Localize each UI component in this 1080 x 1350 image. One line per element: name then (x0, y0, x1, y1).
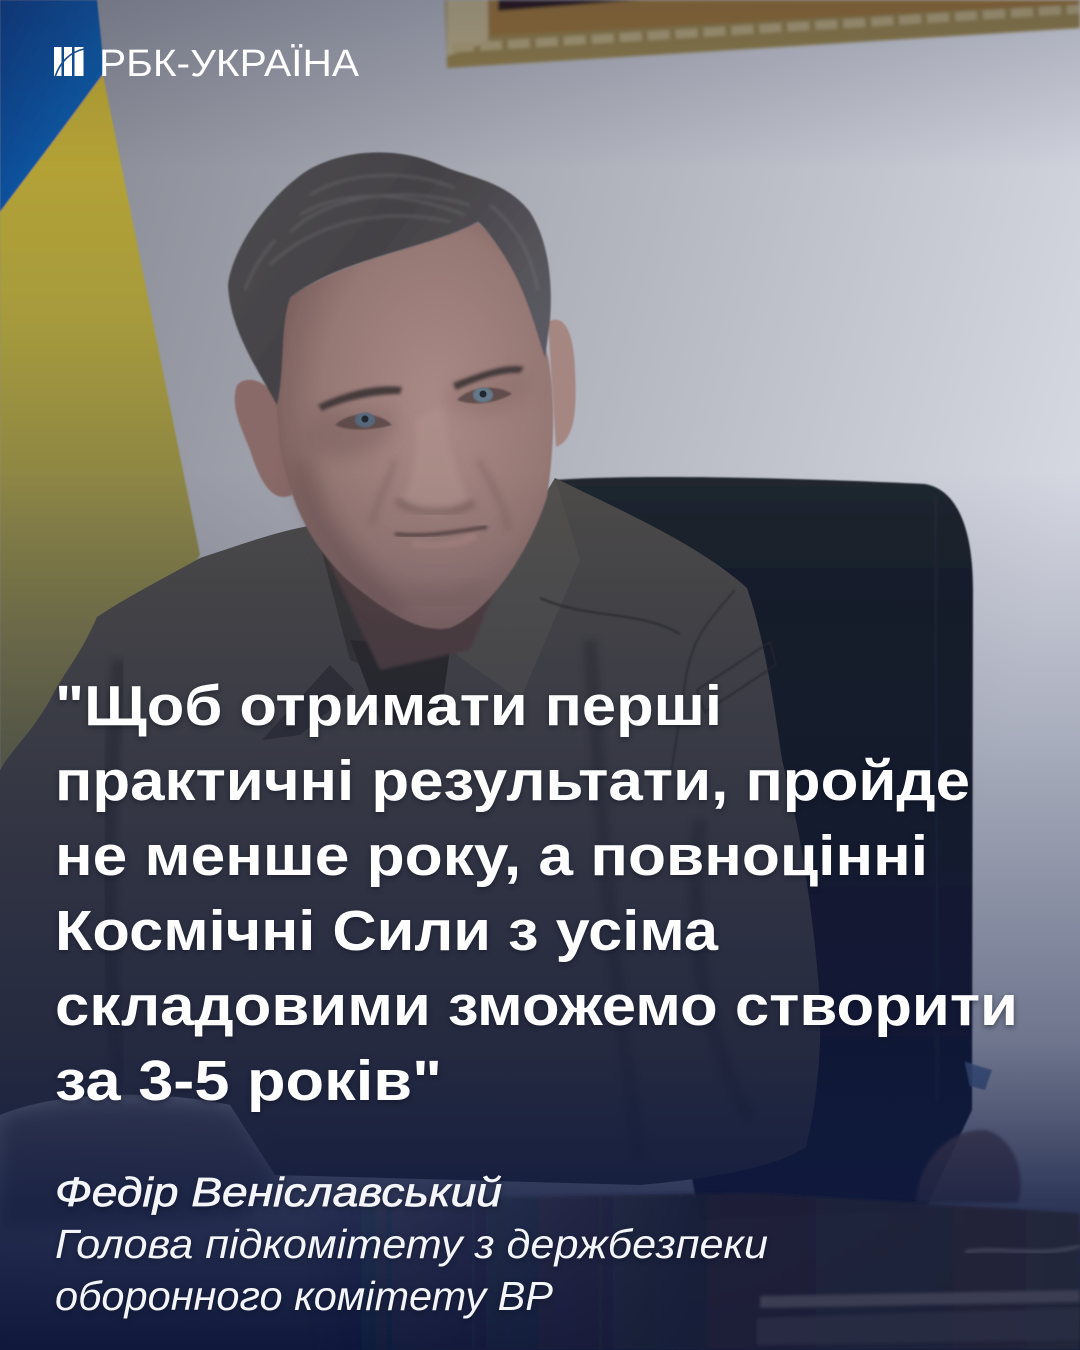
quote text: Космічні Сили з усіма (55, 899, 719, 963)
bottom gradient overlay (0, 470, 1080, 1350)
person: face (276, 222, 553, 629)
quote text: не менше року, а повноцінні (55, 824, 928, 888)
quote text (55, 674, 1018, 1113)
quote text: за 3-5 років" (55, 1049, 442, 1113)
person: torso and shirt (0, 478, 820, 1230)
person: right ear (548, 320, 576, 447)
quote text: "Щоб отримати перші (55, 674, 722, 738)
person: hair (228, 152, 551, 405)
logo wordmark: РБК-УКРАЇНА (99, 43, 360, 85)
person: neck (300, 500, 515, 670)
office chair (555, 477, 992, 1220)
attribution (55, 1169, 768, 1319)
logo icon (54, 47, 84, 77)
attribution: оборонного комітету ВР (55, 1273, 554, 1319)
person: facial features (300, 366, 535, 610)
quote text: складовими зможемо створити (55, 974, 1018, 1038)
attribution: Федір Веніславський (55, 1169, 502, 1215)
quote text: практичні результати, пройде (55, 749, 970, 813)
person: left ear (235, 380, 292, 497)
olive glimpse between arm and body (100, 950, 172, 1095)
picture frame (445, 0, 1080, 68)
logo: РБК-Україна (54, 43, 360, 85)
attribution: Голова підкомітету з держбезпеки (55, 1221, 768, 1267)
desk and objects at bottom (300, 1193, 1080, 1350)
flag of Ukraine (0, 0, 200, 770)
top shading overlay (0, 0, 1080, 170)
armrest and object behind desk (916, 1130, 1021, 1203)
